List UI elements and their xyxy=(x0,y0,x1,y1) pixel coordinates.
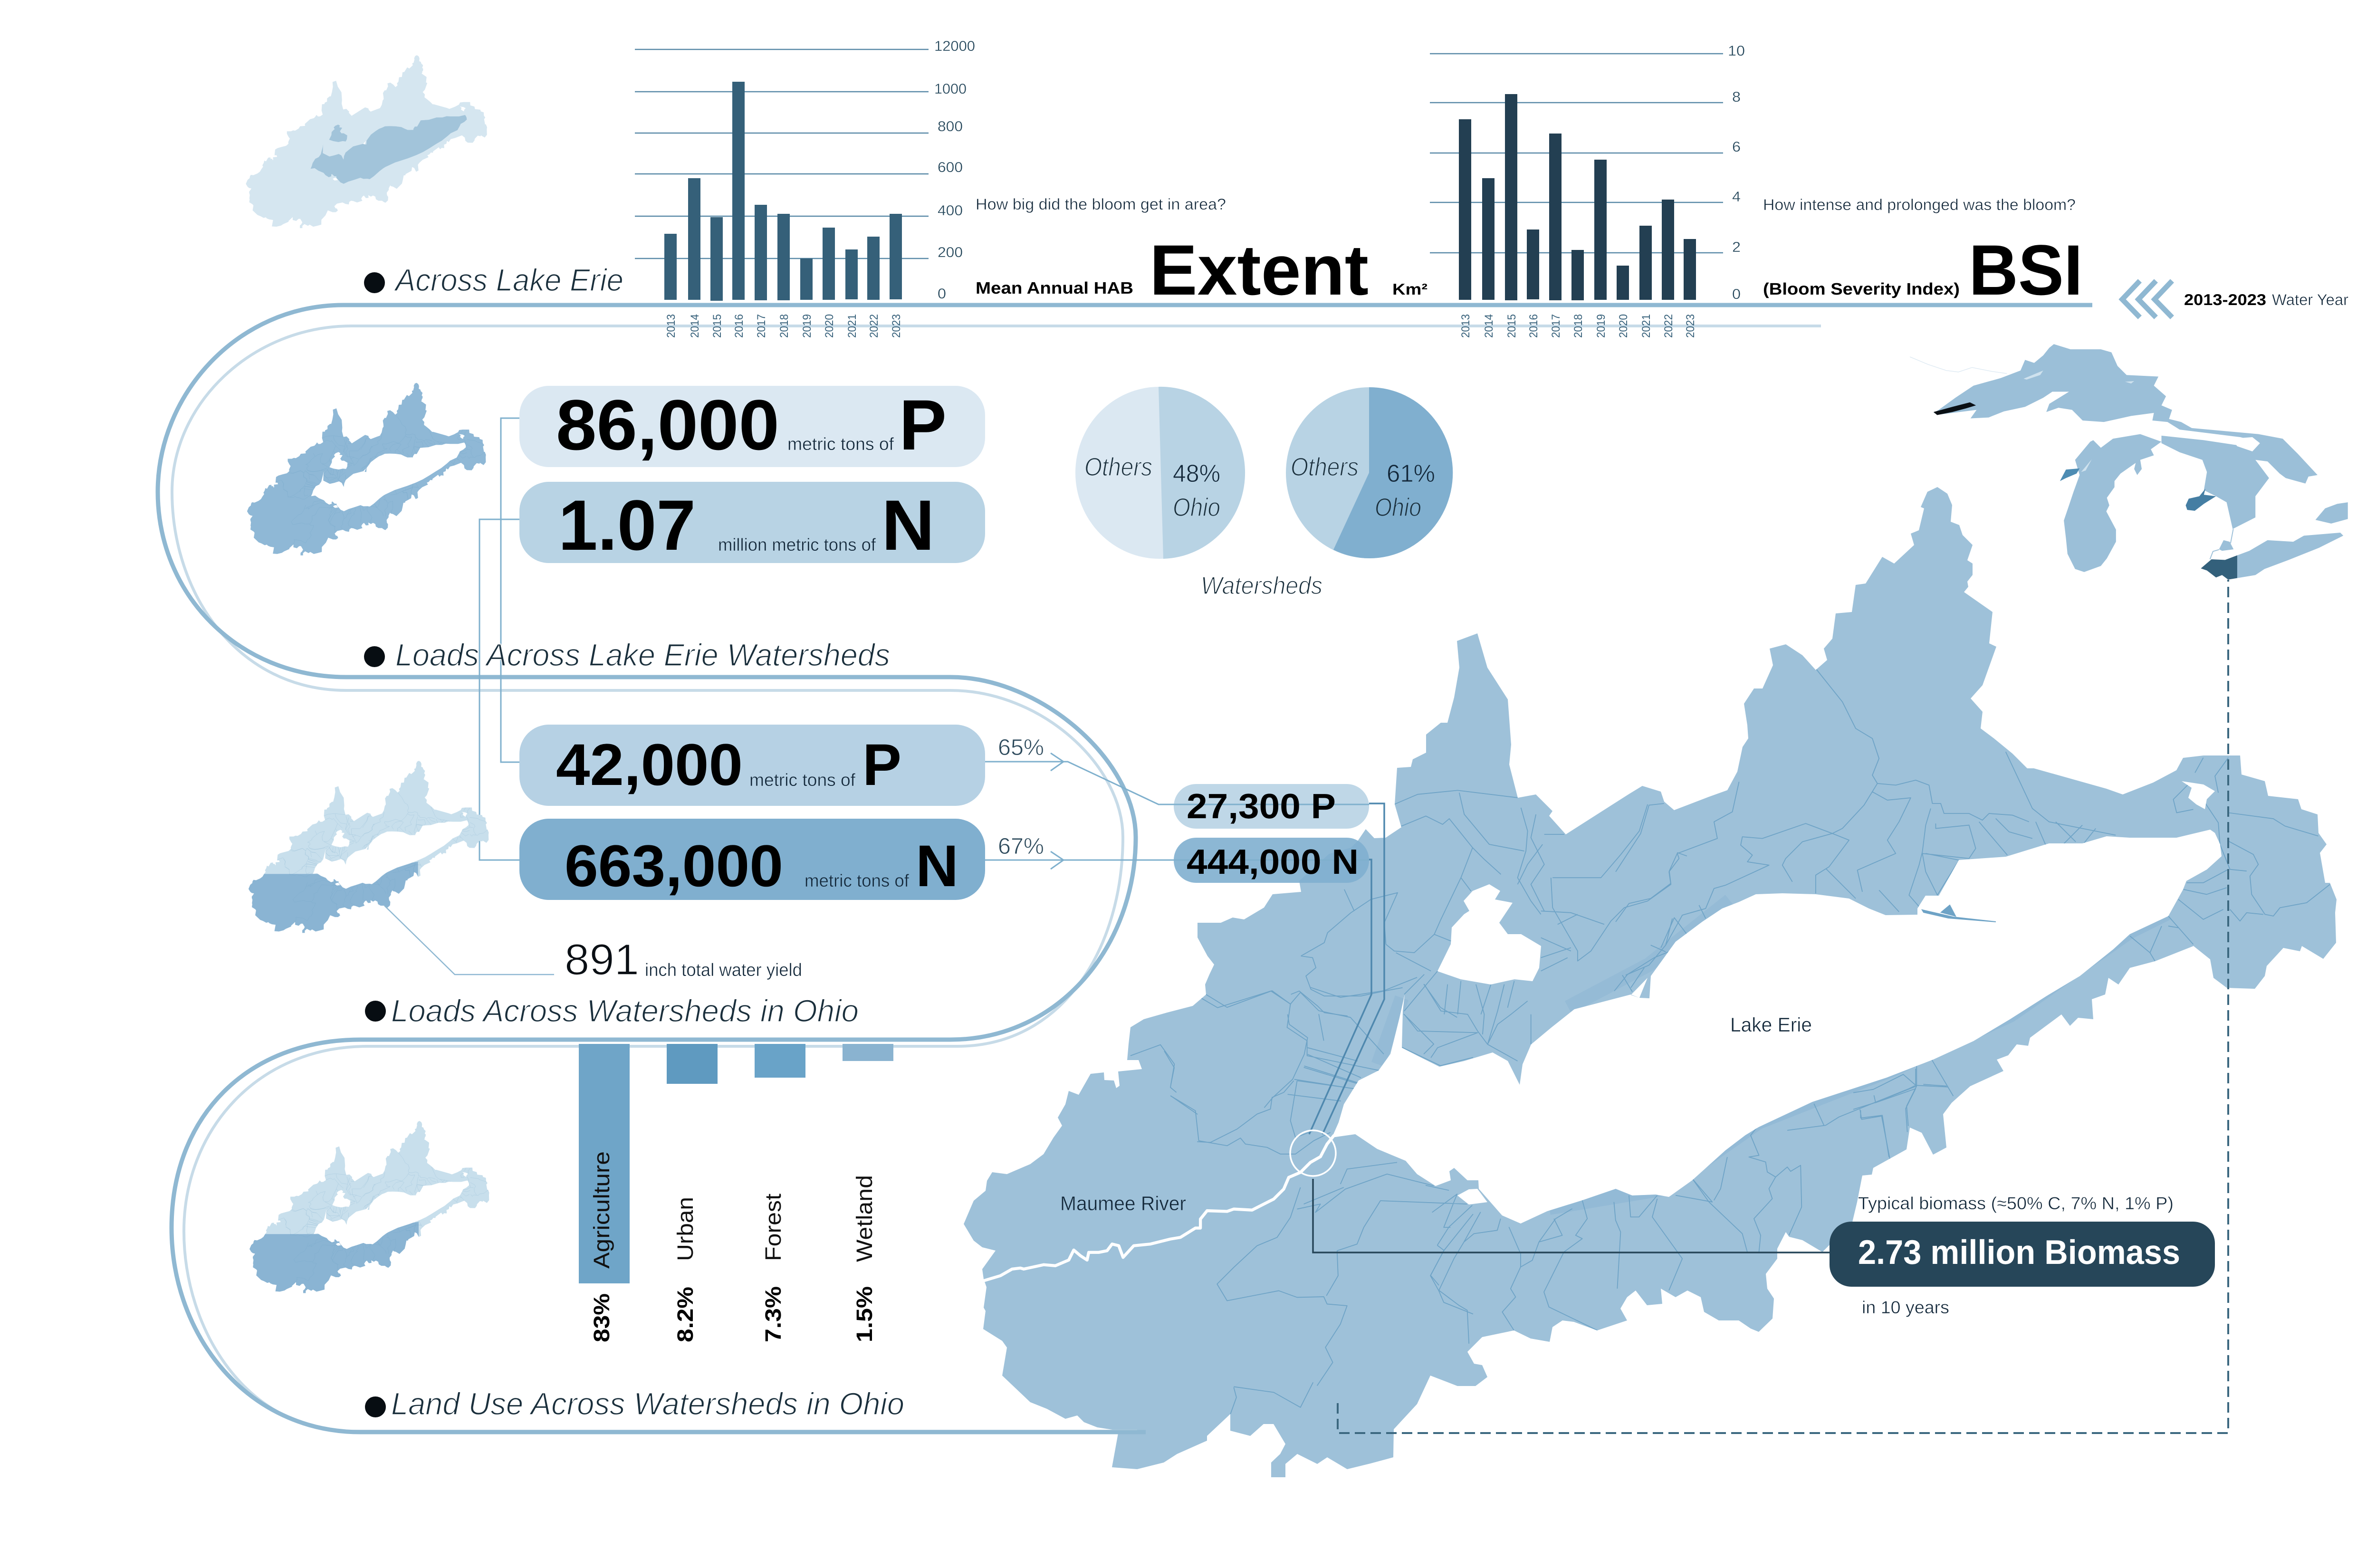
bar chart: BSI: 2019 xyxy=(1595,314,1608,338)
bar chart: BSI: 2020 xyxy=(1617,314,1630,338)
bar chart: HAB extent: 2020 xyxy=(823,314,836,338)
bar chart: HAB extent: 1000 xyxy=(934,81,967,97)
bar: Wetland: Wetland xyxy=(852,1175,877,1262)
bar: Wetland xyxy=(843,1044,893,1342)
bar chart: HAB extent: 2019 xyxy=(801,314,814,338)
bar chart: HAB extent xyxy=(635,38,975,338)
main watershed map of Lake Erie xyxy=(964,487,2337,1477)
bar chart: BSI: 6 xyxy=(1732,139,1741,155)
stat card: 663,000 N xyxy=(519,819,985,900)
callout: biomass: 2.73 million Biomass xyxy=(1858,1233,2180,1272)
connector: total N xyxy=(479,519,519,860)
flow curves connecting sections xyxy=(158,305,2092,1432)
bar chart: BSI: 4 xyxy=(1732,189,1741,205)
Long Point spit xyxy=(1922,905,1996,922)
heading: Extent: Extent xyxy=(1150,230,1369,310)
bar: Urban: Urban xyxy=(672,1197,698,1261)
callout: biomass: in 10 years xyxy=(1862,1298,1949,1317)
pie chart: N share: 61% xyxy=(1387,460,1435,488)
text: water yield xyxy=(565,936,802,984)
bar chart: BSI: 2023 xyxy=(1684,314,1697,338)
bar: Urban: 8.2% xyxy=(672,1287,698,1342)
icon: highlighted western Lake Superior xyxy=(1934,402,1976,415)
bar chart: HAB extent: 600 xyxy=(938,160,963,175)
stat card: 42,000 P: P xyxy=(862,732,901,798)
bar chart: BSI: 2016 xyxy=(1527,314,1540,338)
bar chart: BSI: 2021 xyxy=(1640,314,1653,338)
stat card: 42,000 P: metric tons of xyxy=(749,770,856,790)
stat card: 86,000 P xyxy=(519,385,985,467)
dashed locator line xyxy=(1338,580,2228,1433)
bar chart: BSI: 10 xyxy=(1728,43,1745,59)
text: water year: 2013-2023 xyxy=(2184,291,2266,308)
bar: Forest xyxy=(755,1044,805,1342)
bar chart: BSI: 8 xyxy=(1732,89,1741,105)
bar chart: BSI: 2018 xyxy=(1572,314,1585,338)
icon: highlighted Green Bay xyxy=(2060,468,2079,481)
watershed boundary lines xyxy=(1131,669,2330,1414)
pie chart: P share: Ohio xyxy=(1173,493,1220,522)
connector: total P xyxy=(501,418,519,762)
Great Lakes locator map xyxy=(1910,344,2348,580)
bar: Agriculture: 83% xyxy=(589,1293,614,1342)
bar: Forest: 7.3% xyxy=(760,1286,786,1342)
text: extent question: How big did the bloom get in area? xyxy=(976,195,1226,213)
stat card: 1.07 N: N xyxy=(881,485,935,565)
stat card: 42,000 P: 42,000 xyxy=(556,732,743,798)
arrow: N share to lake xyxy=(985,834,1174,869)
label: Maumee River: Maumee River xyxy=(1060,1192,1186,1214)
connector: thumbnail to water yield xyxy=(384,906,554,975)
text: BSI question: How intense and prolonged was the bloom? xyxy=(1763,196,2076,213)
arrow: P share to lake xyxy=(985,735,1174,804)
bar chart: HAB extent: 2023 xyxy=(890,314,903,338)
heading: Land Use Across Watersheds in Ohio: Land Use Across Watersheds in Ohio xyxy=(391,1386,904,1421)
icon: Lake St Clair and connection xyxy=(2210,529,2233,559)
stat card: 1.07 N: million metric tons of xyxy=(718,535,876,555)
bar chart: BSI: 0 xyxy=(1732,287,1741,302)
stat card: 663,000 N: N xyxy=(916,833,958,899)
bar: Wetland: 1.5% xyxy=(852,1286,877,1342)
stat card: 86,000 P: 86,000 xyxy=(556,385,779,465)
stat pill: 27,300 P: 27,300 P xyxy=(1187,786,1336,826)
bar: Forest: Forest xyxy=(760,1194,786,1261)
stat card: 86,000 P: metric tons of xyxy=(787,434,894,454)
text: water year xyxy=(2184,291,2348,308)
icon: Lake Erie west highlighted xyxy=(2201,555,2237,580)
bar chart: HAB extent: 2021 xyxy=(846,314,859,338)
pie chart: N share: Others xyxy=(1291,453,1359,481)
callout: biomass: Typical biomass (≈50% C, 7% N, 1% P) xyxy=(1858,1194,2174,1213)
text: water yield: inch total water yield xyxy=(645,960,802,980)
text: Mean Annual HAB: Mean Annual HAB xyxy=(976,279,1133,297)
bar chart: BSI: 2014 xyxy=(1483,314,1495,338)
icon: chevrons xyxy=(2122,281,2172,317)
stat card: 1.07 N xyxy=(519,482,985,565)
bar: Agriculture xyxy=(579,1044,630,1342)
bar chart: HAB extent: 200 xyxy=(938,245,963,260)
bar chart: HAB extent: 800 xyxy=(938,119,963,134)
stat card: 663,000 N: 663,000 xyxy=(565,833,783,899)
label: Watersheds: Watersheds xyxy=(1201,572,1322,600)
icon: highlighted Saginaw Bay xyxy=(2186,488,2216,511)
text: water year: Water Year xyxy=(2272,291,2348,308)
thumbnail map: Across Lake Erie xyxy=(246,55,487,228)
pie chart: N share: Ohio xyxy=(1375,493,1421,522)
heading: BSI: BSI xyxy=(1969,230,2083,310)
river mouth circle xyxy=(1290,1130,1336,1176)
bar chart: HAB extent: 400 xyxy=(938,203,963,219)
callout: biomass xyxy=(1830,1194,2215,1317)
bar chart: HAB extent: 2015 xyxy=(711,314,724,338)
pie chart: P share: 48% xyxy=(1173,460,1220,488)
connector: river mouth to biomass xyxy=(1313,1179,1830,1252)
bar chart: BSI: 2015 xyxy=(1505,314,1518,338)
arrow: N share to lake: 67% xyxy=(998,834,1044,859)
bar: Urban xyxy=(667,1044,718,1342)
thumbnail map: Ohio watersheds loads xyxy=(249,761,489,933)
arrow: P share to lake: 65% xyxy=(998,735,1044,760)
icon: Lake Erie east xyxy=(2237,533,2343,578)
bar chart: HAB extent: 2022 xyxy=(868,314,881,338)
stat card: 663,000 N: metric tons of xyxy=(805,871,910,890)
stat card: 1.07 N: 1.07 xyxy=(558,485,696,565)
bar chart: HAB extent: 12000 xyxy=(934,38,975,54)
heading: Across Lake Erie: Across Lake Erie xyxy=(393,262,623,297)
bar chart: HAB extent: 0 xyxy=(938,286,946,302)
bar chart: HAB extent: 2017 xyxy=(755,314,768,338)
thumbnail map: Ohio land use xyxy=(249,1121,489,1293)
icon: Maumee River xyxy=(984,1132,1341,1281)
bar: Agriculture: Agriculture xyxy=(589,1151,614,1269)
heading: Loads Across Lake Erie Watersheds: Loads Across Lake Erie Watersheds xyxy=(395,637,890,672)
bar chart: BSI: 2013 xyxy=(1459,314,1472,338)
bar chart: BSI: 2 xyxy=(1732,239,1741,255)
bar chart: BSI: 2017 xyxy=(1550,314,1562,338)
connector: pills to river mouth xyxy=(1309,803,1384,1134)
icon: Lake Ontario xyxy=(2316,502,2348,524)
stat pill: 444,000 N: 444,000 N xyxy=(1187,842,1359,881)
stat card: 42,000 P xyxy=(519,725,985,806)
text: water yield: 891 xyxy=(565,936,639,984)
section: loads across Lake Erie watersheds thumbnail xyxy=(247,383,486,555)
bar chart: HAB extent: 2016 xyxy=(733,314,746,338)
text: unit Km2: Km² xyxy=(1392,280,1428,298)
bar chart: HAB extent: 2014 xyxy=(689,314,701,338)
label: Lake Erie: Lake Erie xyxy=(1730,1013,1812,1036)
stat card: 86,000 P: P xyxy=(899,385,947,465)
text: Bloom Severity Index: (Bloom Severity Index) xyxy=(1763,280,1960,298)
bar chart: HAB extent: 2013 xyxy=(665,314,678,338)
pie chart: P share: Others xyxy=(1084,453,1152,481)
bar chart: BSI xyxy=(1430,43,1745,338)
bar chart: BSI: 2022 xyxy=(1662,314,1675,338)
bar chart: HAB extent: 2018 xyxy=(778,314,791,338)
pie chart: P share xyxy=(1075,387,1245,559)
bar chart: land use xyxy=(579,1044,893,1342)
pie chart: N share xyxy=(1286,387,1453,558)
heading: Loads Across Watersheds in Ohio: Loads Across Watersheds in Ohio xyxy=(391,993,859,1028)
stat pill: 27,300 P xyxy=(1174,784,1369,829)
